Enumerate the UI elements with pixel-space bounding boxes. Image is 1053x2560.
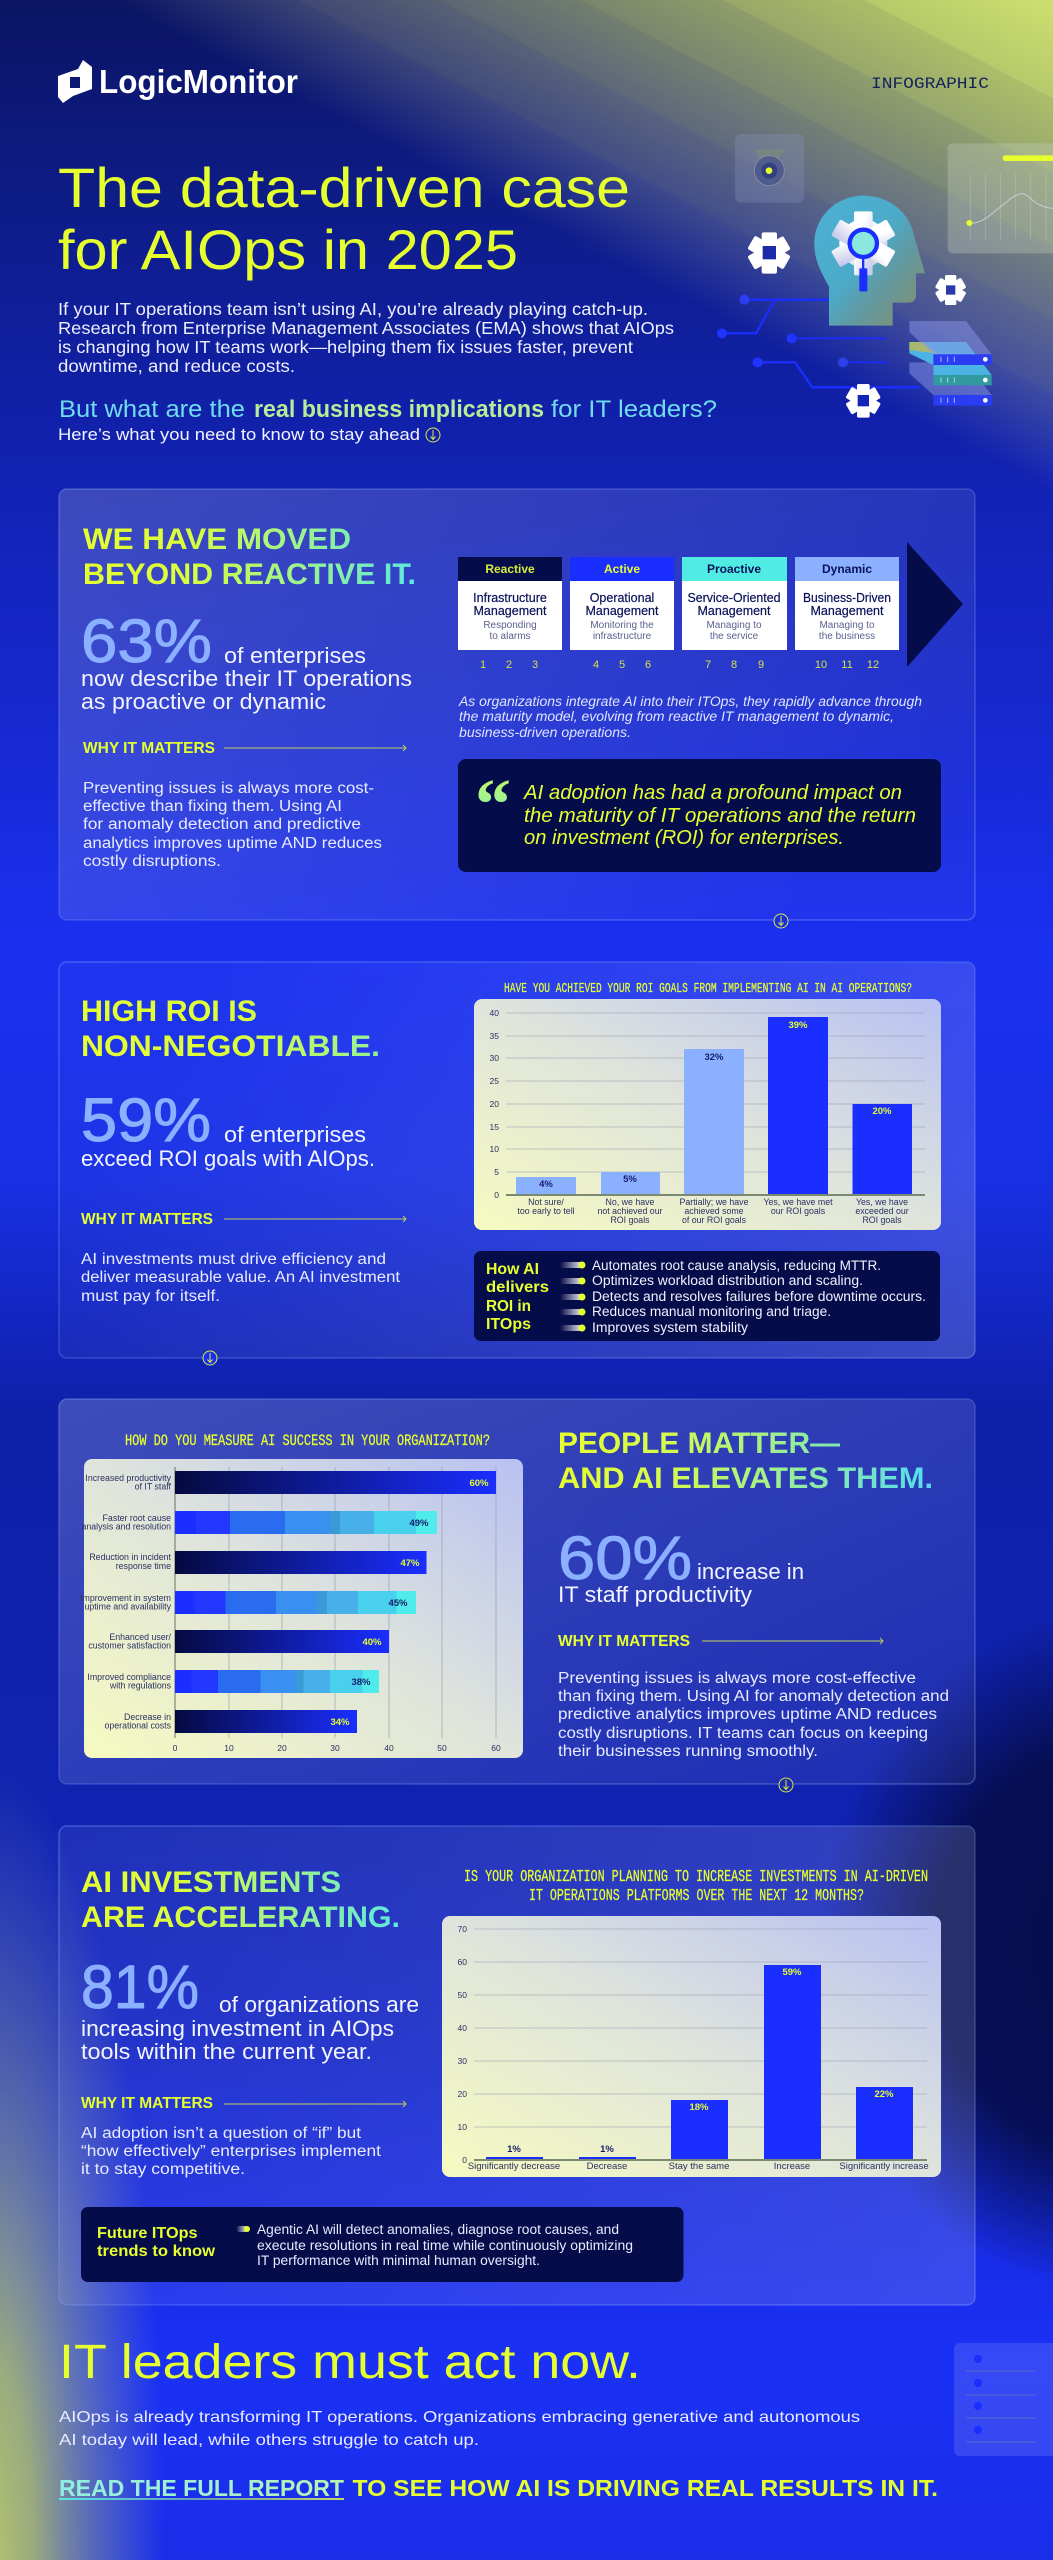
- bar chart: investment plans: 59%: [782, 1967, 802, 1978]
- bar chart: ROI goals: 20: [490, 1099, 499, 1109]
- stat: 81%: 81%: [81, 1953, 199, 2021]
- stage: active: 4: [593, 659, 599, 671]
- bar chart: investment plans: 1%: [507, 2144, 521, 2155]
- question line: for IT leaders?: [551, 396, 717, 423]
- callout: how AI delivers ROI: delivers: [486, 1279, 549, 1296]
- stage: active: [570, 557, 674, 671]
- bar chart: investment plans: 10: [458, 2122, 467, 2132]
- bar chart: ROI goals: exceeded our: [855, 1206, 909, 1216]
- bar chart: measuring AI success: 60%: [469, 1478, 489, 1489]
- bar chart: measuring AI success: 30: [330, 1743, 340, 1753]
- stage: proactive: Management: [698, 604, 771, 618]
- bar chart: ROI goals: 4%: [539, 1179, 553, 1190]
- heading: [83, 523, 416, 591]
- body text: AI adoption isn’t a question of “if” but: [81, 2125, 362, 2142]
- callout: future ITOps trends: execute resolutions in real time while continuously optimizing: [257, 2238, 633, 2253]
- stage: dynamic: the business: [819, 631, 875, 642]
- callout: how AI delivers ROI: Detects and resolves failures before downtime occurs.: [592, 1289, 926, 1304]
- stat: 63%: [81, 607, 412, 714]
- bar chart: measuring AI success: operational costs: [104, 1720, 172, 1730]
- heading: AND AI ELEVATES THEM.: [558, 1462, 933, 1495]
- bar chart: ROI goals: 25: [490, 1076, 499, 1086]
- callout: quote: on investment (ROI) for enterprises.: [524, 827, 844, 849]
- bar chart: measuring AI success: Increased productivity: [85, 1473, 172, 1483]
- callout: how AI delivers ROI: Optimizes workload distribution and scaling.: [592, 1273, 863, 1288]
- why it matters arrow: [83, 740, 406, 757]
- call to action: READ THE FULL REPORT: [59, 2475, 344, 2501]
- stage: reactive: 3: [532, 659, 538, 671]
- bar chart: ROI goals: 39%: [788, 1020, 808, 1031]
- heading: ARE ACCELERATING.: [81, 1901, 400, 1934]
- why it matters arrow: WHY IT MATTERS: [558, 1633, 690, 1650]
- bar chart: investment plans: 60: [458, 1957, 467, 1967]
- callout: quote: the maturity of IT operations and the return: [524, 805, 916, 827]
- icon: quotation mark: “: [475, 764, 511, 844]
- gear and magnifier inside head: [831, 211, 896, 291]
- bar chart: investment plans: 40: [458, 2023, 467, 2033]
- chart title: HOW DO YOU MEASURE AI SUCCESS IN YOUR ORGANIZATION?: [125, 1432, 490, 1450]
- stage: active: 6: [645, 659, 651, 671]
- icon: scroll arrow: [774, 914, 788, 928]
- bar chart: ROI goals: ROI goals: [610, 1215, 650, 1225]
- why it matters arrow: [81, 2095, 406, 2112]
- bar chart: ROI goals: 35: [490, 1031, 499, 1041]
- panel: people matter: [59, 1399, 975, 1792]
- bar chart: measuring AI success: Reduction in incident: [89, 1552, 172, 1562]
- icon: scroll arrow: [203, 1351, 217, 1365]
- bar chart: measuring AI success: 10: [224, 1743, 234, 1753]
- callout: how AI delivers ROI: [474, 1251, 940, 1341]
- stage: dynamic: Business-Driven: [803, 591, 891, 605]
- stage: dynamic: Management: [811, 604, 884, 618]
- bar chart: measuring AI success: Faster root cause: [103, 1513, 171, 1523]
- bar chart: investment plans: [442, 1916, 941, 2177]
- title: [58, 156, 630, 281]
- bar chart: measuring AI success: 45%: [388, 1598, 408, 1609]
- chart title: [464, 1868, 928, 1906]
- stat: 60%: [558, 1524, 804, 1607]
- heading: [81, 1866, 400, 1934]
- closing paragraph: AIOps is already transforming IT operations. Organizations embracing generative and autonomous: [59, 2409, 860, 2426]
- callout: future ITOps trends: trends to know: [97, 2243, 216, 2260]
- label: infographic: INFOGRAPHIC: [871, 75, 989, 93]
- bar chart: investment plans: 50: [458, 1990, 467, 2000]
- subline with down arrow: Here’s what you need to know to stay ahead: [58, 426, 420, 444]
- bar chart: ROI goals: 32%: [704, 1052, 724, 1063]
- bar chart: ROI goals: Partially; we have: [680, 1197, 749, 1207]
- question line: But what are the: [59, 396, 245, 423]
- bar chart: investment plans: 18%: [689, 2102, 709, 2113]
- stage: reactive: 2: [506, 659, 512, 671]
- stage: dynamic: 10: [815, 659, 827, 671]
- bar chart: measuring AI success: 38%: [351, 1677, 371, 1688]
- bar chart: ROI goals: of our ROI goals: [682, 1215, 747, 1225]
- stat: 63%: as proactive or dynamic: [81, 689, 326, 714]
- question line: real business implications: [254, 396, 544, 423]
- bar chart: investment plans: 1%: [600, 2144, 614, 2155]
- bar chart: ROI goals: our ROI goals: [771, 1206, 826, 1216]
- title: for AIOps in 2025: [58, 218, 518, 281]
- icon: LogicMonitor logo mark: [58, 60, 92, 103]
- bar chart: ROI goals: not achieved our: [597, 1206, 663, 1216]
- callout: future ITOps trends: IT performance with minimal human oversight.: [257, 2253, 540, 2268]
- bar chart: ROI goals: 5%: [623, 1174, 637, 1185]
- callout: future ITOps trends: Future ITOps: [97, 2225, 198, 2242]
- heading: WE HAVE MOVED: [83, 523, 351, 556]
- why it matters arrow: WHY IT MATTERS: [81, 1211, 213, 1228]
- bar chart: measuring AI success: response time: [116, 1561, 171, 1571]
- heading: BEYOND REACTIVE IT.: [83, 558, 416, 591]
- bar chart: measuring AI success: with regulations: [109, 1680, 172, 1690]
- body text: predictive analytics improves uptime AND reduces: [558, 1706, 937, 1723]
- bar chart: measuring AI success: Improvement in system: [80, 1593, 171, 1603]
- bar chart: ROI goals: too early to tell: [517, 1206, 575, 1216]
- body text: analytics improves uptime AND reduces: [83, 835, 382, 852]
- stage: dynamic: 12: [867, 659, 879, 671]
- bar chart: measuring AI success: analysis and resolution: [82, 1522, 171, 1532]
- stage: reactive: Reactive: [485, 562, 535, 576]
- icon: scroll arrow: [779, 1778, 793, 1792]
- bar chart: ROI goals: Yes, we have met: [763, 1197, 833, 1207]
- stage: proactive: Service-Oriented: [688, 591, 781, 605]
- stat: 60%: IT staff productivity: [558, 1582, 752, 1607]
- stage: proactive: [682, 557, 787, 671]
- bar chart: investment plans: Increase: [774, 2161, 810, 2172]
- stage: dynamic: Managing to: [819, 620, 875, 631]
- stat: 81%: tools within the current year.: [81, 2039, 372, 2064]
- chart title: IT OPERATIONS PLATFORMS OVER THE NEXT 12 MONTHS?: [529, 1887, 864, 1906]
- bar chart: measuring AI success: 49%: [409, 1518, 429, 1529]
- intro paragraph: downtime, and reduce costs.: [58, 356, 295, 376]
- panel: AI investments: [59, 1826, 975, 2305]
- icon: gear left: [747, 232, 791, 274]
- closing paragraph: [59, 2409, 860, 2449]
- stat: 81%: of organizations are: [219, 1992, 419, 2017]
- body text: “how effectively” enterprises implement: [81, 2143, 382, 2160]
- intro paragraph: If your IT operations team isn’t using AI, you’re already playing catch-up.: [58, 299, 648, 319]
- arrow: maturity direction: [907, 542, 963, 667]
- stat: 63%: now describe their IT operations: [81, 666, 412, 691]
- body text: costly disruptions. IT teams can focus on keeping: [558, 1725, 928, 1742]
- body text: Preventing issues is always more cost-effective: [558, 1670, 916, 1687]
- stat: 81%: [81, 1953, 419, 2064]
- icon: gear right: [935, 275, 966, 305]
- body text: [558, 1670, 949, 1760]
- icon: gear bottom: [845, 384, 881, 418]
- bar chart: ROI goals: 15: [490, 1122, 499, 1132]
- callout: how AI delivers ROI: ROI in: [486, 1298, 531, 1315]
- stage: proactive: 7: [705, 659, 711, 671]
- body text: costly disruptions.: [83, 853, 221, 870]
- body text: deliver measurable value. An AI investment: [81, 1269, 401, 1286]
- maturity caption: the maturity model, evolving from reactive IT management to dynamic,: [459, 709, 894, 724]
- bar chart: ROI goals: 10: [490, 1144, 499, 1154]
- body text: than fixing them. Using AI for anomaly detection and: [558, 1688, 949, 1705]
- why it matters arrow: [81, 1211, 406, 1228]
- callout: how AI delivers ROI: How AI: [486, 1261, 539, 1278]
- logo wordmark: LogicMonitor: [99, 63, 298, 100]
- maturity model: [458, 542, 963, 671]
- call to action: TO SEE HOW AI IS DRIVING REAL RESULTS IN IT.: [352, 2475, 938, 2501]
- bar chart: measuring AI success: 40: [384, 1743, 394, 1753]
- bar chart: ROI goals: [474, 999, 941, 1230]
- callout: quote: [458, 759, 941, 872]
- body text: must pay for itself.: [81, 1288, 220, 1305]
- bar chart: investment plans: 30: [458, 2056, 467, 2066]
- bar chart: ROI goals: ROI goals: [862, 1215, 902, 1225]
- bar chart: measuring AI success: [80, 1459, 523, 1758]
- body text: AI investments must drive efficiency and: [81, 1251, 386, 1268]
- panel: beyond reactive IT: [59, 489, 975, 928]
- bar chart: measuring AI success: Improved compliance: [87, 1672, 171, 1682]
- stage: active: infrastructure: [593, 631, 652, 642]
- bar chart: measuring AI success: uptime and availability: [84, 1602, 172, 1612]
- why it matters arrow: WHY IT MATTERS: [83, 740, 215, 757]
- body text: for anomaly detection and predictive: [83, 816, 361, 833]
- bar chart: measuring AI success: 50: [437, 1743, 447, 1753]
- stat: 59%: of enterprises: [224, 1122, 366, 1147]
- stage: proactive: 8: [731, 659, 737, 671]
- stage: proactive: Proactive: [707, 562, 761, 576]
- stage: dynamic: Dynamic: [822, 562, 872, 576]
- circuit lines: [717, 295, 920, 387]
- bar chart: ROI goals: 0: [494, 1190, 499, 1200]
- call to action: [59, 2475, 938, 2501]
- bar chart: ROI goals: 30: [490, 1053, 499, 1063]
- bar chart: measuring AI success: of IT staff: [135, 1482, 172, 1492]
- why it matters arrow: WHY IT MATTERS: [81, 2095, 213, 2112]
- bar chart: ROI goals: 20%: [872, 1106, 892, 1117]
- bar chart: investment plans: Significantly decrease: [468, 2161, 560, 2172]
- bar chart: investment plans: Decrease: [587, 2161, 627, 2172]
- stage: proactive: 9: [758, 659, 764, 671]
- bar chart: investment plans: 0: [462, 2155, 467, 2165]
- stat: 60%: increase in: [697, 1559, 804, 1584]
- callout: how AI delivers ROI: Improves system stability: [592, 1320, 748, 1335]
- heading: AI INVESTMENTS: [81, 1866, 341, 1899]
- bar chart: ROI goals: 5: [494, 1167, 499, 1177]
- bar chart: ROI goals: Yes, we have: [856, 1197, 908, 1207]
- stat: 60%: 60%: [558, 1524, 692, 1592]
- bar chart: measuring AI success: Decrease in: [124, 1712, 171, 1722]
- question line: [59, 396, 717, 423]
- body text: it to stay competitive.: [81, 2161, 245, 2178]
- bar chart: ROI goals: 40: [490, 1008, 499, 1018]
- bar chart: investment plans: 22%: [874, 2089, 894, 2100]
- stat: 59%: exceed ROI goals with AIOps.: [81, 1146, 375, 1171]
- bar chart: measuring AI success: 20: [277, 1743, 287, 1753]
- body text: their businesses running smoothly.: [558, 1743, 818, 1760]
- bar chart: measuring AI success: 47%: [400, 1558, 420, 1569]
- heading: [81, 995, 380, 1063]
- stage: active: Management: [586, 604, 659, 618]
- stage: reactive: Management: [474, 604, 547, 618]
- stat: 63%: 63%: [81, 607, 212, 675]
- bar chart: measuring AI success: customer satisfaction: [88, 1640, 171, 1650]
- bar chart: measuring AI success: 34%: [330, 1717, 350, 1728]
- callout: how AI delivers ROI: ITOps: [486, 1316, 531, 1333]
- bar chart: ROI goals: Not sure/: [528, 1197, 564, 1207]
- bar chart: investment plans: Significantly increase: [839, 2161, 929, 2172]
- body text: [81, 1251, 401, 1305]
- intro paragraph: is changing how IT teams work—helping them fix issues faster, prevent: [58, 337, 633, 357]
- body text: [83, 780, 382, 870]
- stage: proactive: Managing to: [706, 620, 762, 631]
- body text: [81, 2125, 382, 2178]
- title: The data-driven case: [58, 156, 630, 219]
- bar chart: investment plans: 70: [458, 1924, 467, 1934]
- bar chart: measuring AI success: 0: [173, 1743, 178, 1753]
- callout: future ITOps trends: [81, 2207, 684, 2282]
- stage: active: Operational: [590, 591, 654, 605]
- illustration: AI head with gears and servers: [717, 134, 1053, 418]
- bar chart: investment plans: 20: [458, 2089, 467, 2099]
- callout: quote: AI adoption has had a profound impact on: [523, 782, 902, 804]
- stage: reactive: 1: [480, 659, 486, 671]
- stat: 59%: [81, 1086, 375, 1171]
- stage: proactive: the service: [710, 631, 759, 642]
- stat: 59%: 59%: [81, 1086, 211, 1154]
- stat: 81%: increasing investment in AIOps: [81, 2016, 394, 2041]
- stage: dynamic: 11: [841, 659, 853, 671]
- header: [58, 60, 989, 103]
- panel: high ROI: [59, 962, 975, 1365]
- stage: reactive: to alarms: [489, 631, 531, 642]
- callout: how AI delivers ROI: Reduces manual monitoring and triage.: [592, 1304, 831, 1319]
- intro paragraph: Research from Enterprise Management Associates (EMA) shows that AIOps: [58, 318, 674, 338]
- body text: Preventing issues is always more cost-: [83, 780, 374, 797]
- stage: reactive: Infrastructure: [473, 591, 547, 605]
- server stack: [909, 321, 992, 406]
- heading: [558, 1427, 933, 1495]
- bar chart: investment plans: Stay the same: [669, 2161, 729, 2172]
- closing heading: IT leaders must act now.: [59, 2336, 641, 2389]
- stage: reactive: Responding: [483, 620, 537, 631]
- stage: active: Monitoring the: [590, 620, 654, 631]
- closing paragraph: AI today will lead, while others struggle to catch up.: [59, 2432, 479, 2449]
- intro paragraph: [58, 299, 674, 376]
- maturity caption: [458, 694, 922, 740]
- stage: dynamic: [795, 557, 899, 671]
- callout: future ITOps trends: Agentic AI will detect anomalies, diagnose root causes, and: [257, 2222, 619, 2237]
- maturity caption: business-driven operations.: [459, 725, 631, 740]
- bar chart: measuring AI success: 40%: [362, 1637, 382, 1648]
- why it matters arrow: [558, 1633, 883, 1650]
- stat: 63%: of enterprises: [224, 643, 366, 668]
- chart tile: [948, 143, 1053, 253]
- heading: HIGH ROI IS: [81, 995, 257, 1028]
- stage: reactive: [458, 557, 562, 671]
- bar chart: ROI goals: achieved some: [684, 1206, 744, 1216]
- maturity caption: As organizations integrate AI into their ITOps, they rapidly advance through: [458, 694, 922, 709]
- body text: effective than fixing them. Using AI: [83, 798, 342, 815]
- callout: how AI delivers ROI: Automates root cause analysis, reducing MTTR.: [592, 1258, 881, 1273]
- stage: active: Active: [604, 562, 640, 576]
- bar chart: measuring AI success: Enhanced user/: [109, 1632, 172, 1642]
- bar chart: ROI goals: No, we have: [606, 1197, 655, 1207]
- stage: active: 5: [619, 659, 625, 671]
- icon: head silhouette: [814, 196, 925, 326]
- heading: NON-NEGOTIABLE.: [81, 1030, 380, 1063]
- decorative tile: bottom right: [954, 2343, 1053, 2456]
- icon: sensor tile: [735, 134, 804, 203]
- heading: PEOPLE MATTER—: [558, 1427, 840, 1460]
- bar chart: measuring AI success: 60: [491, 1743, 501, 1753]
